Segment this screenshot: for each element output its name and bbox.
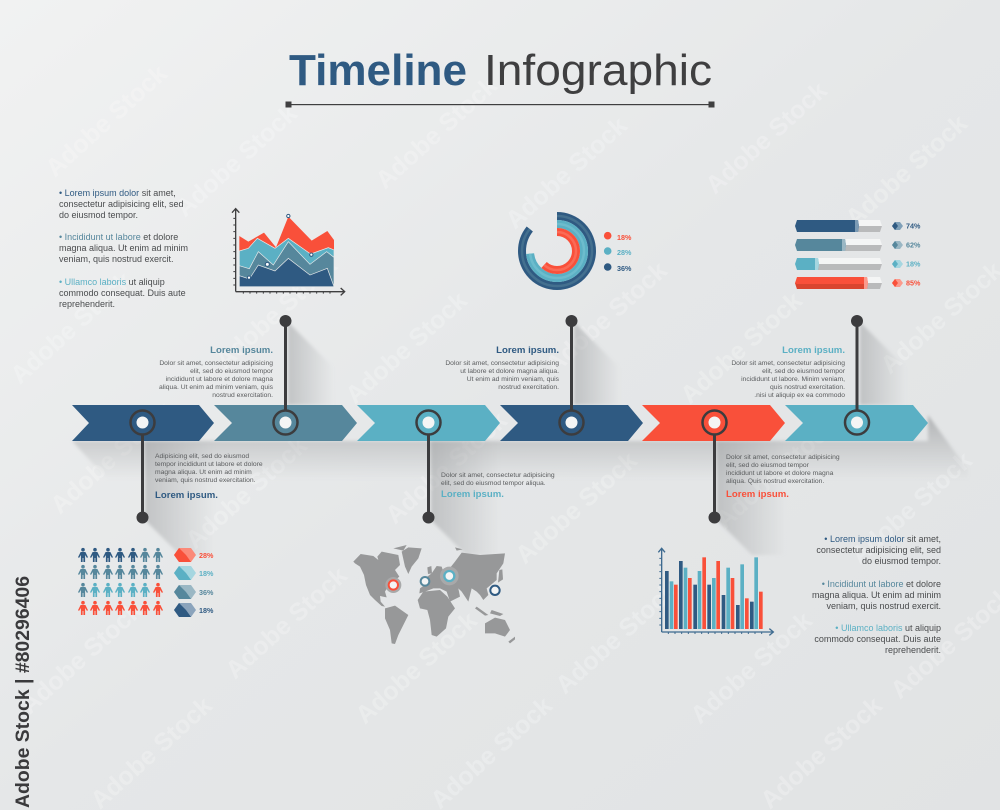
watermark pattern: Adobe Stock (45, 396, 178, 519)
text: milestone 4 caption: Dolor sit amet, consectetur adipisicing (445, 360, 559, 367)
chart axes (232, 209, 345, 295)
donut legend: 28% (617, 248, 632, 257)
progress bars (795, 220, 921, 289)
text: milestone 1 caption: Adipisicing elit, sed do eiusmod (155, 453, 249, 460)
pin 1 (down) (130, 410, 154, 524)
row 2 (78, 565, 163, 579)
badge 18% navy: 18% (199, 606, 214, 615)
text: milestone 5 caption: elit, sed do eiusmod tempor (726, 462, 810, 469)
chevron 2 (214, 405, 357, 441)
panel: left bullet list: reprehenderit. (59, 299, 115, 309)
donut chart (522, 216, 592, 286)
text: milestone 4 caption (445, 345, 560, 391)
stock id sidebar: Adobe Stock | #80296406 (13, 576, 34, 808)
text: milestone 1 caption: magna aliqua. Ut enim ad minim (155, 469, 252, 476)
donut legend: 36% (617, 264, 632, 273)
panel: left bullet list: • Ullamco laboris (59, 277, 127, 287)
panel: left bullet list: magna aliqua. Ut enim ad minim (59, 243, 188, 253)
text: milestone 2 caption: incididunt ut labore et dolore magna (166, 376, 273, 383)
title: Infographic (484, 46, 712, 95)
bar 62%: 62% (906, 240, 921, 250)
title: Timeline (289, 46, 467, 95)
area: teal layer (239, 238, 334, 287)
panel: right bullet list: do eiusmod tempor. (862, 556, 941, 566)
text: milestone 5 caption (726, 454, 840, 500)
people pictogram (78, 548, 163, 615)
badge 36%: 36% (199, 588, 214, 597)
bar chart (658, 548, 773, 635)
text: milestone 2 caption: elit, sed do eiusmod tempor (190, 368, 274, 375)
chevron 1 (72, 405, 214, 441)
ring: red (538, 232, 576, 270)
text: milestone 2 caption: nostrud exercitation. (212, 392, 273, 399)
text: milestone 6 caption (731, 345, 846, 399)
watermark pattern: Adobe Stock (350, 606, 483, 729)
text: milestone 2 caption: Lorem ipsum. (210, 345, 273, 356)
text: milestone 4 caption: ut labore et dolore magna aliqua. (460, 368, 559, 375)
panel: right bullet list: veniam, quis nostrud exercit. (826, 601, 941, 611)
bars (665, 557, 763, 629)
chart ticks (233, 218, 330, 294)
panel: left bullet list: commodo consequat. Duis aute (59, 288, 186, 298)
panel: right bullet list (812, 534, 941, 655)
text: milestone 5 caption: Lorem ipsum. (726, 489, 789, 500)
donut legend (604, 232, 632, 273)
text: milestone 6 caption: quis nostrud exercitation. (770, 384, 845, 391)
watermark pattern: Adobe Stock (550, 576, 683, 699)
panel: left bullet list: • Lorem ipsum dolor (59, 188, 139, 198)
watermark pattern: Adobe Stock (685, 606, 818, 729)
map marker: steel (421, 577, 429, 586)
panel: left bullet list: consectetur adipisicing elit, sed (59, 199, 184, 209)
watermark pattern: Adobe Stock (340, 286, 473, 409)
timeline ribbon (72, 405, 928, 441)
watermark pattern: Adobe Stock (840, 109, 973, 232)
text: milestone 6 caption: Dolor sit amet, consectetur adipisicing (731, 360, 845, 367)
panel: left bullet list: sit amet, (139, 188, 176, 198)
ring: navy (522, 216, 592, 286)
text: milestone 5 caption: incididunt ut labore et dolore magna (726, 470, 834, 477)
text: milestone 1 caption: veniam, quis nostrud exercitation. (155, 477, 256, 484)
people legend (174, 548, 214, 617)
chevron 3 (357, 405, 500, 441)
pin 2 (up) (274, 315, 298, 434)
watermark pattern: Adobe Stock (180, 431, 313, 554)
panel: right bullet list: magna aliqua. Ut enim ad minim (812, 590, 941, 600)
panel: left bullet list: veniam, quis nostrud exercit. (59, 254, 174, 264)
watermark pattern: Adobe Stock (5, 266, 138, 389)
pin 5 (down) (702, 410, 726, 524)
watermark pattern: Adobe Stock (700, 76, 833, 199)
text: milestone 3 caption: Lorem ipsum. (441, 489, 504, 500)
watermark pattern: Adobe Stock (845, 446, 978, 569)
row 4 (78, 601, 163, 615)
badge 18% teal: 18% (199, 569, 214, 578)
text: milestone 2 caption: aliqua. Ut enim ad minim veniam, quis (159, 384, 274, 391)
text: milestone 5 caption: aliqua. Quis nostrud exercitation. (726, 478, 824, 485)
panel: left bullet list: ut aliquip (126, 277, 165, 287)
panel: right bullet list: • Ullamco laboris ut aliquip (835, 623, 941, 633)
donut legend: 18% (617, 233, 632, 242)
text: milestone 3 caption: elit, sed do eiusmod tempor aliqua. (441, 480, 546, 487)
text: milestone 4 caption: Ut enim ad minim veniam, quis (467, 376, 560, 383)
panel: right bullet list: consectetur adipisicing elit, sed (816, 545, 941, 555)
text: milestone 1 caption: tempor incididunt ut labore et dolore (155, 461, 263, 468)
text: milestone 2 caption (159, 345, 274, 399)
badge 28%: 28% (199, 551, 214, 560)
text: milestone 6 caption: .nisi ut aliquip ex ea commodo (754, 392, 845, 399)
text: milestone 1 caption (155, 453, 263, 501)
watermark pattern: Adobe Stock (510, 446, 643, 569)
chevron 6 (785, 405, 928, 441)
panel: right bullet list: commodo consequat. Duis aute (814, 634, 941, 644)
ribbon shadow (72, 415, 968, 480)
watermark pattern: Adobe Stock (170, 99, 303, 222)
watermark pattern: Adobe Stock (500, 111, 633, 234)
row 3 (78, 583, 163, 597)
bar 85%: 85% (906, 278, 921, 288)
axes (658, 548, 773, 635)
title (286, 46, 714, 108)
text: milestone 3 caption (441, 472, 555, 500)
text: milestone 5 caption: Dolor sit amet, consectetur adipisicing (726, 454, 840, 461)
continents (353, 545, 515, 644)
panel: left bullet list (59, 188, 188, 309)
map marker: navy (490, 586, 500, 595)
text: milestone 4 caption: nostrud exercitation. (498, 384, 559, 391)
bar 74%: 74% (906, 222, 921, 230)
pin 3 (down) (416, 410, 440, 524)
area: navy layer (239, 258, 334, 287)
panel: right bullet list: • Lorem ipsum dolor sit amet, (824, 534, 941, 544)
area: steel layer (239, 242, 334, 287)
text: milestone 2 caption: Dolor sit amet, consectetur adipisicing (159, 360, 273, 367)
watermark pattern: Adobe Stock (210, 251, 343, 374)
watermark pattern: Adobe Stock (675, 286, 808, 409)
text: milestone 4 caption: Lorem ipsum. (496, 345, 559, 356)
watermark pattern: Adobe Stock (220, 561, 353, 684)
watermark pattern: Adobe Stock (710, 411, 843, 534)
axis ticks (659, 558, 762, 634)
chart markers (247, 214, 313, 279)
text: milestone 6 caption: Lorem ipsum. (782, 345, 845, 356)
panel: left bullet list: do eiusmod tempor. (59, 210, 138, 220)
ring: teal (530, 224, 584, 278)
panel: right bullet list: • Incididunt ut labore et dolore (822, 579, 941, 589)
watermark pattern: Adobe Stock (380, 406, 513, 529)
watermark pattern: Adobe Stock (40, 59, 173, 182)
area chart (232, 209, 345, 295)
watermark pattern: Adobe Stock (370, 71, 503, 194)
pin 6 (up) (845, 315, 869, 434)
text: milestone 3 caption: Dolor sit amet, consectetur adipisicing (441, 472, 555, 479)
row 1 (78, 548, 163, 562)
panel: right bullet list: reprehenderit. (885, 645, 941, 655)
panel: left bullet list: • Incididunt ut labore (59, 232, 141, 242)
text: milestone 1 caption: Lorem ipsum. (155, 490, 218, 501)
map marker: red (385, 577, 401, 593)
text: milestone 6 caption: elit, sed do eiusmod tempor (762, 368, 846, 375)
pin shadows (145, 322, 906, 555)
panel: left bullet list: et dolore (141, 232, 178, 242)
chevron 4 (500, 405, 643, 441)
text: milestone 6 caption: incididunt ut labore. Minim veniam, (741, 376, 845, 383)
pin 4 (up) (560, 315, 584, 434)
watermark pattern: Adobe Stock (15, 596, 148, 719)
map marker: teal (440, 567, 459, 585)
chevron 5 (642, 405, 785, 441)
area: red layer (239, 217, 334, 287)
watermark pattern: Adobe Stock (540, 256, 673, 379)
bar 18%: 18% (906, 260, 921, 268)
world map (353, 545, 515, 644)
